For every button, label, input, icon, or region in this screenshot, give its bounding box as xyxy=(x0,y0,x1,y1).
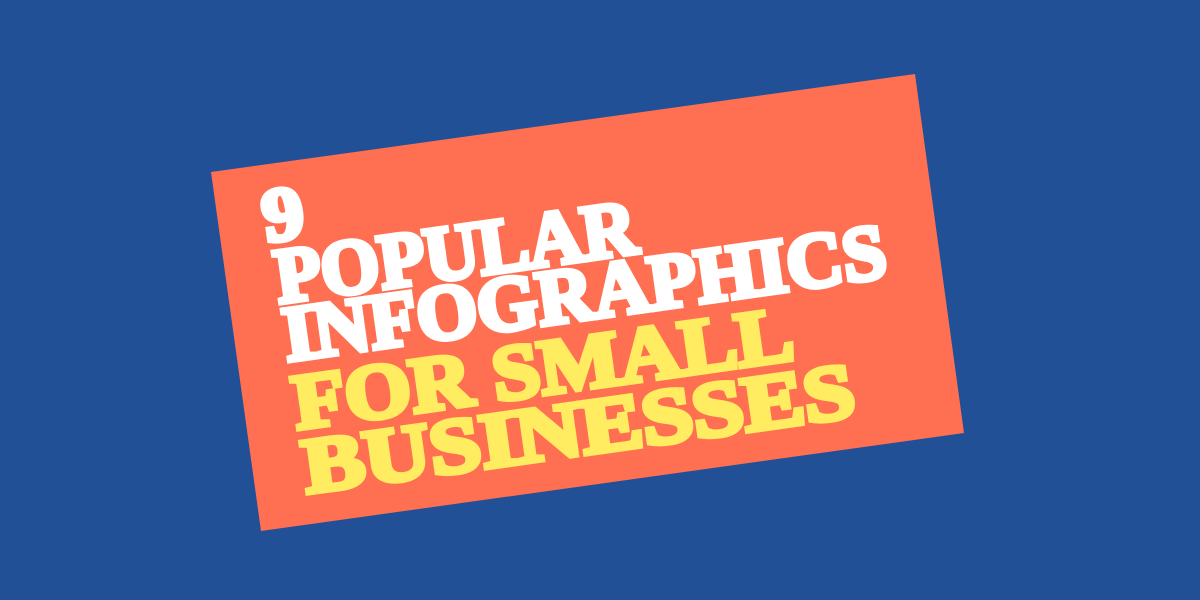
title line: 9: 9 xyxy=(257,170,309,259)
title: white lines xyxy=(257,170,891,378)
title line: INFOGRAPHICS: INFOGRAPHICS xyxy=(277,207,891,378)
title line: BUSINESSES: BUSINESSES xyxy=(297,346,860,510)
panel: coral rotated card xyxy=(211,74,964,531)
title line: POPULAR: POPULAR xyxy=(269,183,643,320)
title: yellow lines xyxy=(287,290,860,510)
title line: FOR SMALL: FOR SMALL xyxy=(287,290,798,446)
